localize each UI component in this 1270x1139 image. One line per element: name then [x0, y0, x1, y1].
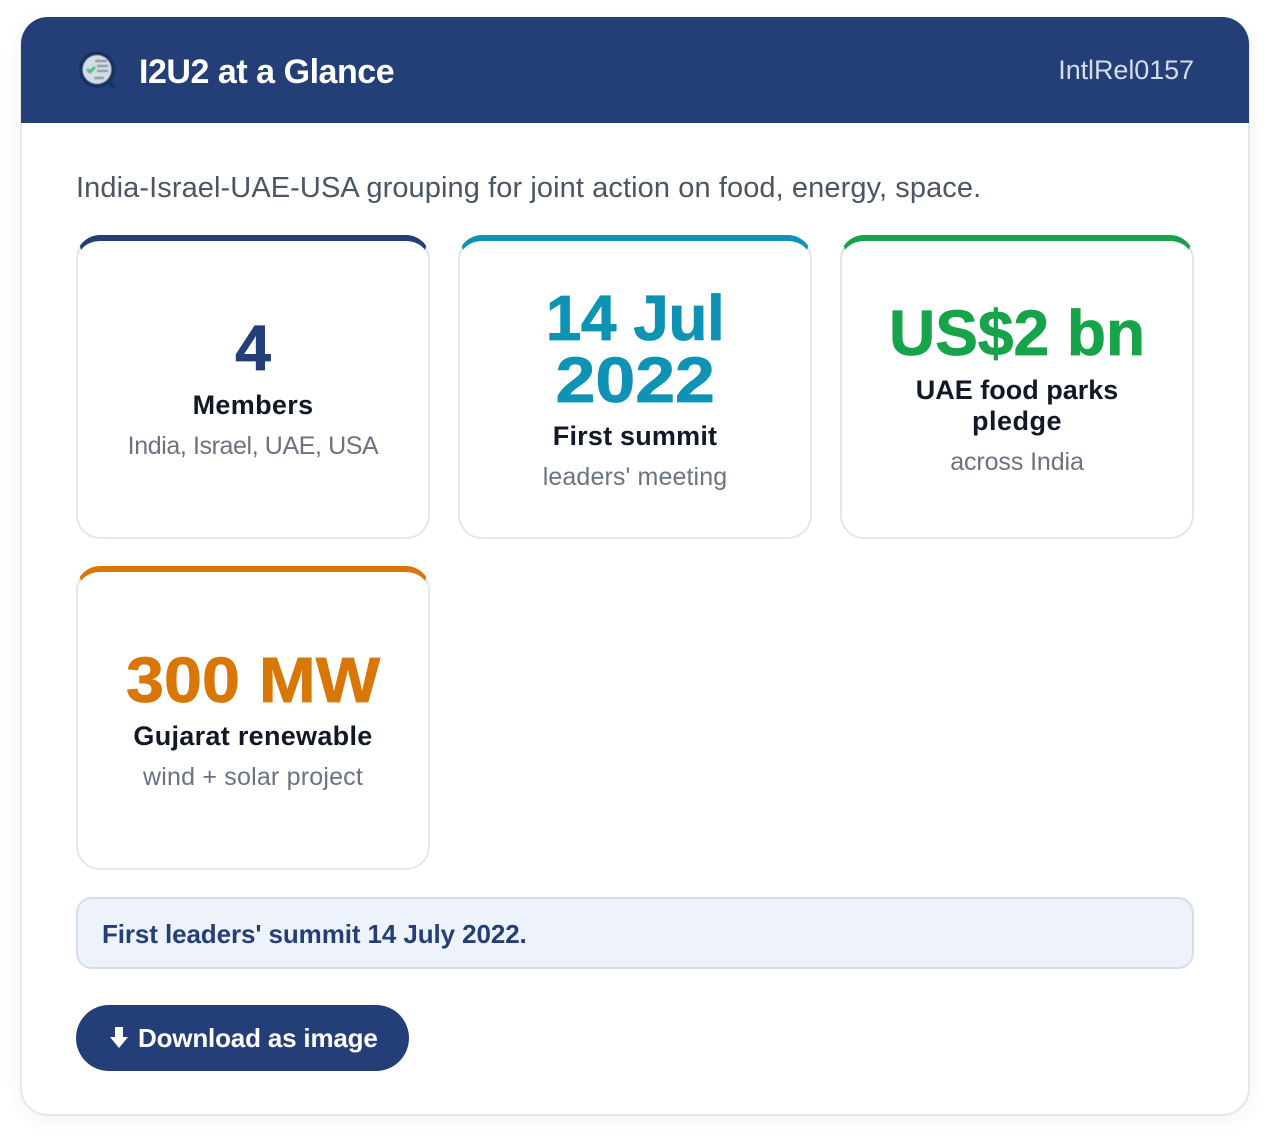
stat value: 4 — [235, 312, 271, 384]
stat note: India, Israel, UAE, USA — [128, 432, 378, 460]
panel: first summit — [458, 235, 812, 539]
title: I2U2 at a Glance — [139, 53, 394, 91]
download button — [76, 1005, 409, 1071]
stat label: First summit — [553, 421, 717, 451]
stat note: leaders' meeting — [543, 463, 727, 491]
stat label: Gujarat renewable — [133, 721, 373, 751]
stat value: 2022 — [555, 344, 715, 416]
stat value: 14 Jul — [546, 282, 724, 354]
panel: members — [76, 235, 430, 539]
callout — [76, 897, 1194, 969]
stat label: UAE food parks — [916, 375, 1118, 405]
stat label: Members — [193, 390, 313, 420]
icon: down arrow — [110, 1027, 128, 1048]
callout: First leaders' summit 14 July 2022. — [102, 919, 527, 949]
stat value — [546, 282, 724, 416]
intro text: India-Israel-UAE-USA grouping for joint action on food, energy, space. — [76, 172, 981, 204]
stat label: pledge — [972, 406, 1062, 436]
panel: renewable project — [76, 566, 430, 870]
panel: food parks pledge — [840, 235, 1194, 539]
code label: IntlRel0157 — [1058, 55, 1194, 85]
stat label — [916, 375, 1118, 436]
header bar — [21, 17, 1249, 123]
stat note: across India — [950, 448, 1084, 476]
stat value: US$2 bn — [889, 297, 1145, 369]
stat value: 300 MW — [126, 644, 380, 716]
button label: Download as image — [138, 1023, 378, 1053]
icon: checklist magnifier logo — [78, 52, 115, 88]
stat note: wind + solar project — [143, 763, 363, 791]
